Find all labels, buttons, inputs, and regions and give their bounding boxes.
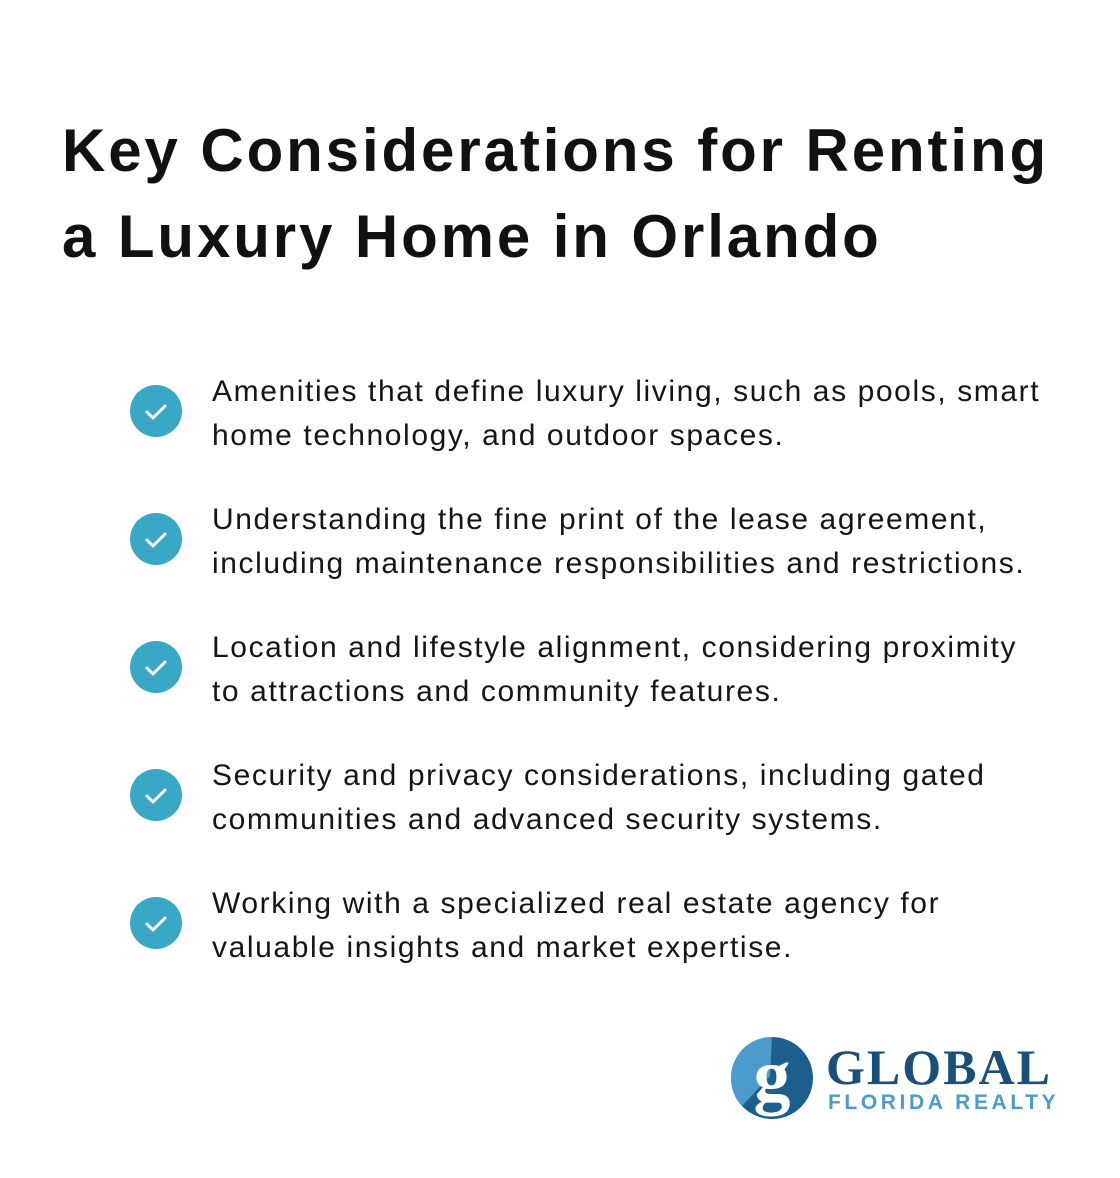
text: valuable insights and market expertise.	[212, 931, 793, 964]
item 5	[130, 887, 940, 964]
text	[212, 631, 1017, 708]
item 2	[130, 503, 1025, 580]
text: Amenities that define luxury living, such as pools, smart	[212, 375, 1040, 408]
text: Security and privacy considerations, including gated	[212, 759, 986, 792]
text: home technology, and outdoor spaces.	[212, 419, 784, 452]
item 3	[130, 631, 1017, 708]
text: Location and lifestyle alignment, considering proximity	[212, 631, 1017, 664]
logo mark: g	[754, 1036, 790, 1117]
text: including maintenance responsibilities and restrictions.	[212, 547, 1025, 580]
icon: check	[130, 385, 182, 437]
text: communities and advanced security systems.	[212, 803, 883, 836]
text: to attractions and community features.	[212, 675, 781, 708]
text	[212, 887, 940, 964]
icon: check	[130, 641, 182, 693]
title: a Luxury Home in Orlando	[62, 203, 882, 270]
text	[212, 375, 1040, 452]
text	[212, 503, 1025, 580]
title	[62, 117, 1049, 270]
logo text: GLOBAL	[826, 1039, 1052, 1095]
logo mark	[730, 1036, 813, 1119]
icon: check	[130, 897, 182, 949]
icon: check	[130, 769, 182, 821]
item 4	[130, 759, 986, 836]
logo: FLORIDA REALTY	[828, 1091, 1059, 1114]
item 1	[130, 375, 1040, 452]
text: Understanding the fine print of the lease agreement,	[212, 503, 987, 536]
icon: check	[130, 513, 182, 565]
logo	[730, 1036, 1059, 1119]
text: Working with a specialized real estate agency for	[212, 887, 940, 920]
title: Key Considerations for Renting	[62, 117, 1049, 184]
text	[212, 759, 986, 836]
